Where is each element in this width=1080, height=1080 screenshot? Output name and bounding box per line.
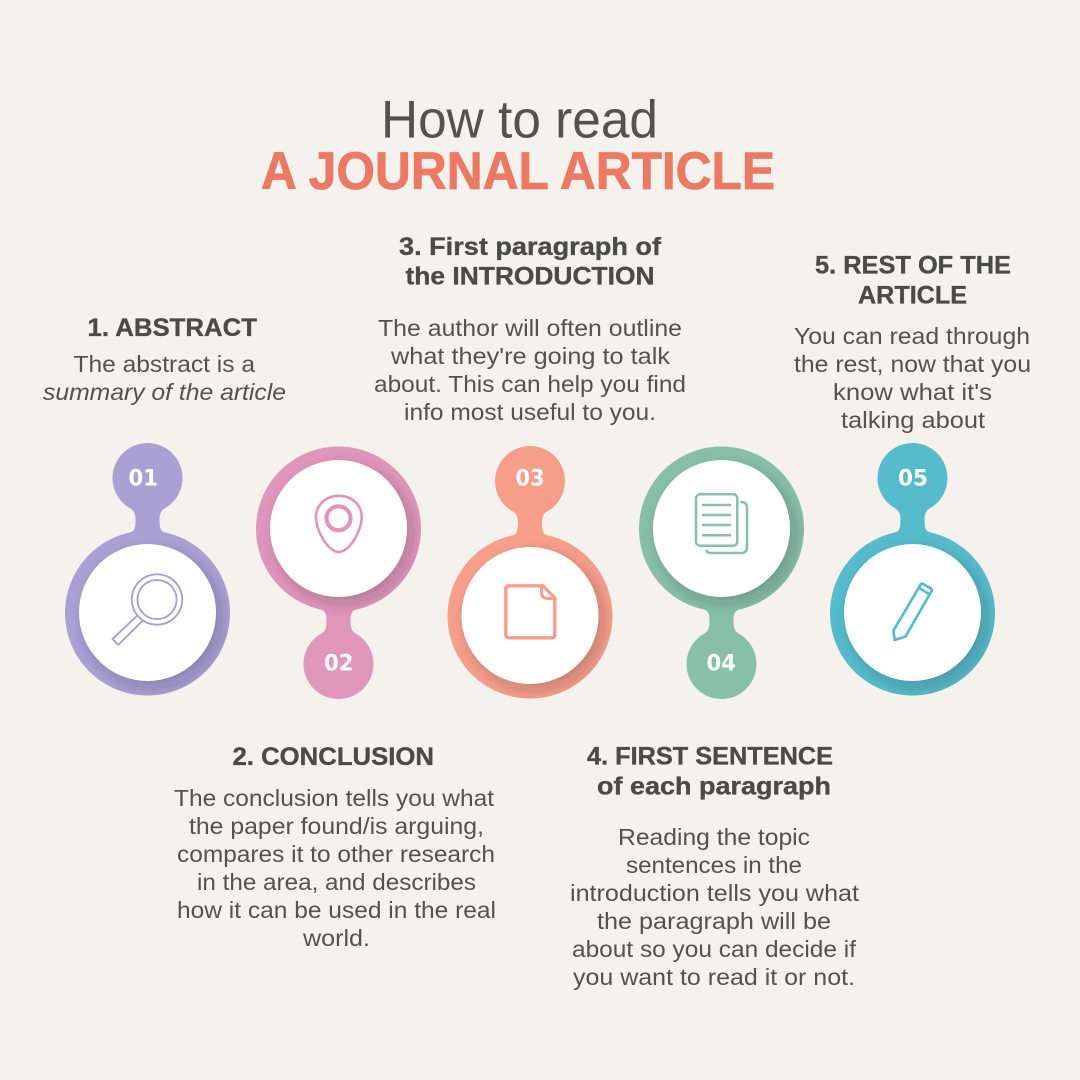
step 4 text: first sentence of each paragraph: you want to read it or not.	[573, 964, 855, 990]
step 5 text: rest of the article: the rest, now that you	[794, 351, 1031, 377]
step 3 text: first paragraph of the introduction: what they're going to talk	[390, 343, 671, 369]
step 5 text: rest of the article: talking about	[841, 407, 986, 433]
step 5 text: rest of the article: You can read through	[794, 323, 1030, 349]
icon: location pin	[316, 496, 362, 552]
step 2 text: conclusion: compares it to other research	[177, 841, 495, 867]
number 05: 05	[898, 466, 928, 492]
step 2 graphic: pink location pin	[256, 446, 421, 699]
step 4 text: first sentence of each paragraph: about so you can decide if	[572, 936, 857, 962]
step 3 text: first paragraph of the introduction: info most useful to you.	[404, 399, 656, 425]
number 03: 03	[516, 466, 544, 492]
step 3 text: first paragraph of the introduction: 3. First paragraph of	[399, 233, 662, 261]
step 4 text: first sentence of each paragraph: sentences in the	[626, 852, 802, 878]
step 5 text: rest of the article: ARTICLE	[858, 282, 967, 310]
step 3 text: first paragraph of the introduction: The author will often outline	[378, 315, 682, 341]
icon: pencil	[894, 584, 932, 640]
title	[261, 90, 775, 201]
step 2 text: conclusion: the paper found/is arguing,	[189, 813, 484, 839]
number 04: 04	[706, 652, 736, 676]
step 4 text: first sentence of each paragraph: introduction tells you what	[570, 880, 860, 906]
step 1 text: abstract	[43, 314, 286, 405]
icon: stacked pages	[696, 494, 747, 553]
step 4 text: first sentence of each paragraph	[570, 742, 860, 990]
step 3 text: first paragraph of the introduction	[374, 233, 686, 425]
number 01: 01	[128, 466, 158, 492]
step 2 text: conclusion: how it can be used in the real	[177, 897, 496, 923]
step 3 graphic: salmon document	[448, 446, 612, 699]
step 5 text: rest of the article: 5. REST OF THE	[815, 252, 1011, 280]
step 2 text: conclusion: The conclusion tells you what	[174, 785, 495, 811]
step 2 text: conclusion: in the area, and describes	[197, 869, 476, 895]
title: How to read	[381, 90, 658, 150]
step 4 graphic: green pages	[639, 446, 804, 699]
icon: document	[506, 586, 555, 638]
step 5 text: rest of the article	[794, 252, 1031, 433]
step 4 text: first sentence of each paragraph: 4. FIRST SENTENCE	[587, 742, 833, 770]
step 1 text: abstract: summary of the article	[43, 379, 286, 405]
step 1 text: abstract: The abstract is a	[74, 351, 255, 377]
step 3 text: first paragraph of the introduction: about. This can help you find	[374, 371, 686, 397]
step 4 text: first sentence of each paragraph: the paragraph will be	[597, 908, 831, 934]
step 3 text: first paragraph of the introduction: the INTRODUCTION	[406, 262, 654, 290]
step 4 text: first sentence of each paragraph: Reading the topic	[618, 824, 810, 850]
step 2 text: conclusion	[174, 743, 496, 951]
step 2 text: conclusion: world.	[302, 925, 370, 951]
step 1 text: abstract: 1. ABSTRACT	[88, 314, 257, 342]
title: A JOURNAL ARTICLE	[261, 142, 775, 201]
icon: magnifying glass	[112, 574, 182, 645]
step 5 graphic: teal pencil	[830, 443, 995, 696]
step 5 text: rest of the article: know what it's	[833, 379, 992, 405]
step 4 text: first sentence of each paragraph: of each paragraph	[597, 772, 831, 800]
step 2 text: conclusion: 2. CONCLUSION	[232, 743, 434, 771]
number 02: 02	[324, 652, 354, 676]
step 1 graphic: purple magnifier	[65, 443, 230, 696]
